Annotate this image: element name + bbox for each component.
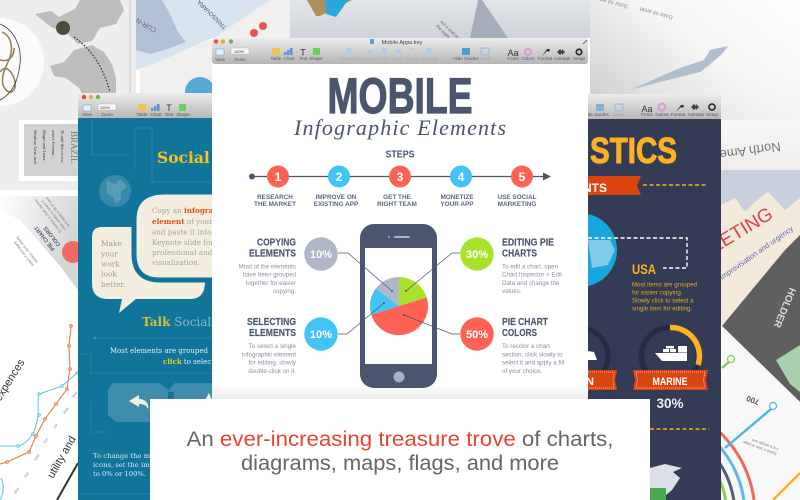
chart: pie <box>370 277 428 335</box>
step 5 <box>497 166 537 208</box>
step 2: EXISTING APP <box>314 201 359 208</box>
toolbar: Table <box>271 56 282 61</box>
page: line chart expenses <box>0 192 84 500</box>
page: line chart expenses: Jul <box>52 423 58 430</box>
toolbar: Forward <box>340 56 357 61</box>
callout: copying elements <box>239 236 338 295</box>
leader lines <box>338 253 460 334</box>
callout: pie chart colors: section, click slowly to <box>502 352 563 358</box>
steps heading: STEPS <box>386 150 415 160</box>
toolbar: 100% <box>100 105 111 110</box>
toolbar: T <box>300 48 306 58</box>
page: meeting poster: it is a simple text <box>750 437 779 451</box>
page: line chart expenses: PIE CHART <box>33 224 57 251</box>
note text: icons, set the im <box>93 461 150 469</box>
toolbar: Mobile Apps.key <box>382 40 423 46</box>
ribbon: marine <box>633 370 708 390</box>
callout: copying elements: have been grouped <box>243 272 297 278</box>
icon: phone <box>360 224 437 388</box>
callout: copying elements: Most of the elements <box>239 264 296 270</box>
page: line chart expenses: Mar <box>13 486 21 494</box>
page: stamp: select Format › <box>51 130 56 159</box>
bubble text: left: better. <box>101 280 126 289</box>
page: blue map region <box>135 0 330 107</box>
bubble text: left: Make <box>101 239 122 248</box>
page: line chart expenses: Jun <box>42 437 49 444</box>
chart: marine donut <box>642 327 699 384</box>
callout: editing pie charts: Chart Inspector > Edit <box>502 272 562 278</box>
body text <box>110 347 214 366</box>
page: line chart expenses: section, click slowly <box>15 235 39 264</box>
toolbar: Zoom <box>101 112 113 117</box>
caption text: An ever-increasing treasure trove of charts, <box>186 428 614 451</box>
step 4: 4 <box>458 170 465 184</box>
toolbar: Chart <box>150 112 162 117</box>
callout: editing pie charts: values. <box>502 288 522 295</box>
toolbar: Mask <box>614 112 625 117</box>
heading: Talk Social: Talk Social <box>142 315 211 329</box>
note text: to 0% or 100%. <box>93 470 146 478</box>
bubble text: main: and paste it into <box>152 228 211 236</box>
main window: mobile infographic <box>212 38 588 401</box>
step 3: RIGHT TEAM <box>377 201 417 208</box>
page: meeting poster: HOLDER <box>770 286 797 330</box>
left window: social keynote <box>78 93 269 500</box>
heading: Social: Social Media <box>157 148 269 167</box>
callout: pie chart colors: 50% <box>466 329 488 341</box>
toolbar: Format <box>671 112 686 117</box>
page: stamp: BRAZIL <box>69 131 79 164</box>
toolbar: Backward <box>357 56 378 61</box>
step 2: IMPROVE ON <box>316 194 357 201</box>
callout: pie chart colors <box>460 316 564 375</box>
note text <box>93 452 151 478</box>
toolbar: Ungroup <box>420 56 438 61</box>
page: blue map region: CUR-N <box>135 16 158 33</box>
toolbar: Fonts <box>507 56 519 61</box>
toolbar: 100% <box>234 49 245 54</box>
toolbar: Setup <box>573 56 585 61</box>
toolbar: Colors <box>521 56 535 61</box>
ribbon <box>580 176 641 195</box>
callout: selecting elements: ELEMENTS <box>249 327 296 339</box>
callout: pie chart colors: select it and apply a fill <box>502 360 564 366</box>
toolbar: Animate <box>688 112 705 117</box>
toolbar: Animate <box>554 56 571 61</box>
callout: selecting elements: SELECTING <box>247 316 296 328</box>
icon: globe <box>99 175 131 207</box>
page: meeting poster: MEETING <box>692 204 777 266</box>
callout: copying elements: ELEMENTS <box>249 248 296 260</box>
callout: pie chart colors: To recolor a chart <box>502 343 550 350</box>
callout: editing pie charts: 30% <box>466 249 488 261</box>
page: world map with coffee route <box>0 0 136 190</box>
heading: logistics: STICS <box>590 130 677 171</box>
toolbar: Hide Guides <box>583 112 609 117</box>
toolbar: T <box>166 103 172 113</box>
page: stamp: Shape and Lines › <box>42 130 47 164</box>
icon: ship <box>655 346 687 361</box>
page: line chart expenses: click slowly to select it <box>40 198 67 231</box>
page: top centre clippings: the eight selection <box>435 23 465 53</box>
callout: copying elements: copying. <box>273 288 296 295</box>
bubble text: main: Keynote slide for <box>152 238 214 247</box>
page: meeting poster <box>692 170 800 500</box>
callout: copying elements: 10% <box>310 249 332 261</box>
page: line chart expenses: select it and apply <box>13 240 35 267</box>
title: MOBILE <box>328 68 472 124</box>
usa text: Slowly click to select a <box>632 298 694 304</box>
toolbar: Shape <box>176 112 190 117</box>
toolbar: Hide Guides <box>453 56 479 61</box>
note text: To change the m <box>93 452 151 460</box>
page: top centre clippings: ect it and drag one or <box>439 19 474 54</box>
page: top right with map: North America <box>697 139 782 165</box>
page: top centre clippings <box>290 0 590 58</box>
bubble text: left: work <box>101 260 120 268</box>
step 1: RESEARCH <box>257 194 293 201</box>
bubble text: left: look <box>101 270 117 278</box>
page: line chart expenses: Apr <box>23 471 30 478</box>
toolbar: Front <box>379 56 390 61</box>
globe <box>543 213 617 287</box>
toolbar: Text <box>299 56 308 61</box>
toolbar: Shape <box>309 56 323 61</box>
step 1: 1 <box>275 170 282 184</box>
toolbar: Mask <box>480 56 491 61</box>
ribbon: NTS <box>583 181 607 195</box>
speech bubble main <box>134 192 225 280</box>
step 2 <box>314 166 359 208</box>
ribbon: marine: MARINE <box>652 376 688 388</box>
steps timeline <box>249 166 551 208</box>
page: stamp: Shadow, Line, and <box>32 130 38 165</box>
callout: pie chart colors: of your choice. <box>502 368 543 375</box>
callout: selecting elements: double-click on it. <box>248 368 296 375</box>
toolbar: Colors <box>655 112 669 117</box>
callout: editing pie charts: Data and change the <box>502 280 560 287</box>
bubble text: left <box>100 239 126 289</box>
page: stamp <box>0 119 81 190</box>
page: line chart expenses: and apply a fill of your <box>44 196 71 228</box>
page: line chart expenses: Aug <box>62 407 69 414</box>
toolbar: Format <box>538 56 553 61</box>
bubble text: main: Copy an infographic <box>152 206 231 215</box>
value: marine percent: 30% <box>656 396 684 411</box>
page: line chart expenses: COLORS <box>43 225 62 247</box>
usa text <box>632 282 698 312</box>
callout: selecting elements: infographic element <box>242 352 296 358</box>
toolbar: Group <box>406 56 419 61</box>
callout: editing pie charts: CHARTS <box>502 248 537 260</box>
callout: copying elements: together for easier <box>246 280 296 287</box>
bubble text: left: your <box>100 250 118 258</box>
callout: selecting elements: for editing, slowly <box>249 360 297 366</box>
page: meeting poster: improvisation and urgency <box>718 224 795 282</box>
step 1 <box>254 166 296 208</box>
caption panel <box>150 399 650 500</box>
usa text: for easier copying. <box>632 290 683 296</box>
step 1: THE MARKET <box>254 201 296 208</box>
page: top right with map <box>590 0 800 175</box>
icon buttons <box>108 383 212 422</box>
chart: left partial donut: N <box>586 376 594 388</box>
callout: pie chart colors: PIE CHART <box>502 316 548 328</box>
toolbar: Table <box>137 112 148 117</box>
step 3: 3 <box>397 170 404 184</box>
bubble text: main: professional and <box>152 248 213 257</box>
callout: selecting elements: To select a single <box>249 343 297 350</box>
map: world <box>650 464 682 500</box>
body text: Most elements are grouped <box>110 347 209 355</box>
toolbar <box>212 38 588 64</box>
page: stamp: To add this arrow <box>60 130 65 163</box>
callout: editing pie charts: EDITING PIE <box>502 236 554 248</box>
step 5: USE SOCIAL <box>497 194 537 201</box>
callout: selecting elements: 10% <box>310 329 332 341</box>
toolbar: Fonts <box>641 112 653 117</box>
bubble text: main: visualization. <box>151 258 200 267</box>
step 3: GET THE <box>383 194 412 201</box>
toolbar: View <box>82 112 93 117</box>
callout: selecting elements <box>242 316 338 375</box>
caption text <box>186 428 614 475</box>
toolbar <box>580 94 721 120</box>
subtitle: Infographic Elements <box>293 115 506 140</box>
page: line chart expenses: To recolor a chart section <box>34 198 63 234</box>
step 4 <box>440 166 474 208</box>
step 2: 2 <box>336 170 343 184</box>
toolbar: Aa <box>641 104 653 114</box>
step 3 <box>377 166 417 208</box>
toolbar: Text <box>165 112 174 117</box>
usa text: single item for editing. <box>632 306 692 312</box>
callout: copying elements: COPYING <box>257 236 296 248</box>
caption text: diagrams, maps, flags, and more <box>241 452 559 475</box>
callout: editing pie charts <box>460 236 562 295</box>
step 4: MONETIZE <box>440 194 474 201</box>
speech bubble back <box>92 227 205 313</box>
label: USA: USA <box>632 261 656 277</box>
callout: editing pie charts: To edit a chart, open <box>502 264 559 270</box>
toolbar: Back <box>393 56 404 61</box>
body text: click to select <box>163 357 214 366</box>
toolbar: Zoom <box>234 57 246 62</box>
toolbar <box>78 93 218 119</box>
page: line chart expenses: utility and <box>45 434 79 480</box>
right window: logistics keynote <box>543 94 721 500</box>
toolbar: View <box>215 57 226 62</box>
page: meeting poster: 700 <box>745 393 761 407</box>
page: meeting poster: Stand in side of page <box>742 440 777 456</box>
callout: pie chart colors: COLORS <box>502 327 537 339</box>
bubble text: main <box>151 206 231 267</box>
chart: left partial donut <box>552 328 617 390</box>
page: top right with map: Dolor sit amet <box>639 5 674 20</box>
step 5: 5 <box>519 170 526 184</box>
page: line chart expenses: May <box>33 453 41 462</box>
step 5: MARKETING <box>498 201 536 208</box>
toolbar: Setup <box>706 112 718 117</box>
toolbar: Aa <box>507 48 519 58</box>
step 4: YOUR APP <box>440 201 474 208</box>
toolbar: Chart <box>283 56 295 61</box>
page: line chart expenses: Sep <box>71 391 78 398</box>
usa text: Most items are grouped <box>632 282 698 288</box>
bubble text: main: element of your <box>152 217 213 226</box>
